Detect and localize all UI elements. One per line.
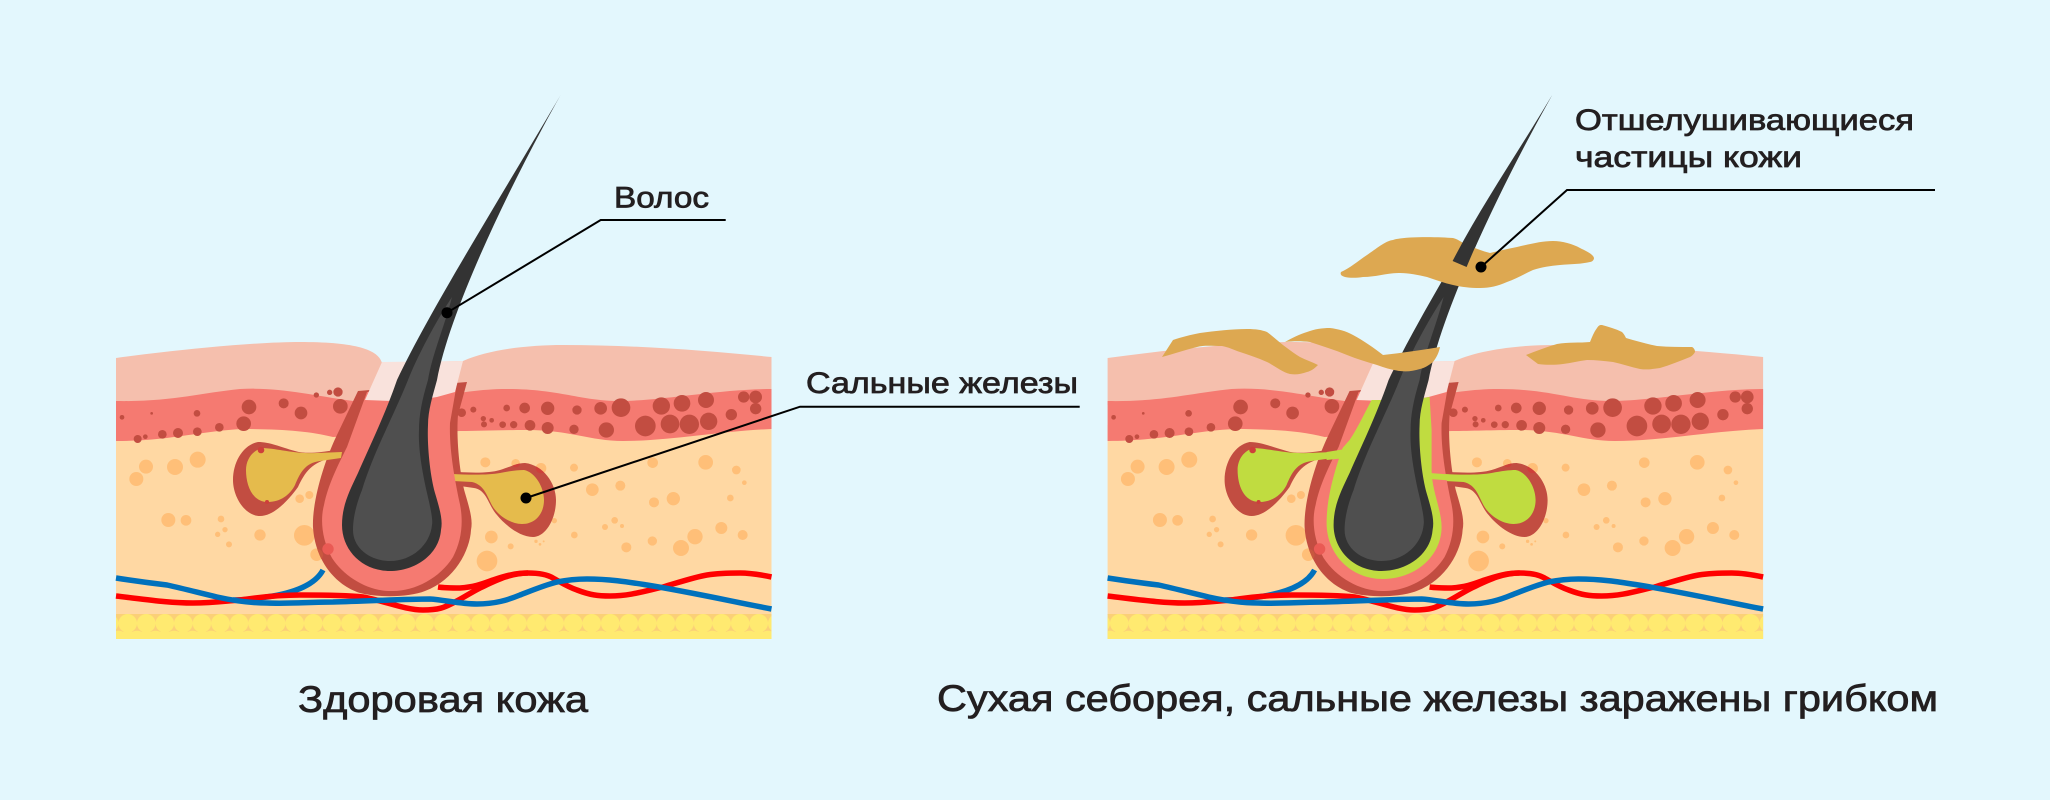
hair xyxy=(1334,95,1552,571)
skin layers with fat dots and blood vessels xyxy=(116,342,772,639)
icon: infected sebaceous glands xyxy=(1238,448,1536,524)
follicle wall and sebaceous gland walls xyxy=(233,382,556,596)
flaking skin particles xyxy=(1162,237,1695,374)
hair tip above flake xyxy=(1453,95,1552,267)
skin layers with fat dots and blood vessels xyxy=(1108,342,1763,639)
caption: dry seborrhea: Сухая себорея, сальные железы заражены грибком xyxy=(937,678,1938,719)
caption: healthy skin: Здоровая кожа xyxy=(298,679,588,720)
follicle interior xyxy=(322,361,463,591)
callout dot xyxy=(1476,262,1486,272)
panel: healthy skin diagram xyxy=(116,95,772,639)
dermal dots xyxy=(120,387,762,561)
follicle interior xyxy=(1314,361,1455,591)
label line 2: частицы кожи xyxy=(1575,141,1802,174)
icon: healthy sebaceous glands xyxy=(246,448,544,524)
callout: flaking skin particles xyxy=(1476,104,1935,272)
follicle wall and sebaceous gland walls xyxy=(1225,382,1548,596)
fungal sheath around hair xyxy=(1327,397,1457,579)
callout line xyxy=(526,407,1080,498)
callout: sebaceous glands xyxy=(520,367,1080,504)
panel: dry seborrhea skin diagram xyxy=(1108,95,1763,639)
callout line xyxy=(447,220,726,313)
label: hair: Волос xyxy=(614,182,709,214)
dermal dots xyxy=(1111,387,1754,561)
label: sebaceous glands: Сальные железы xyxy=(806,367,1078,400)
callout dot xyxy=(442,307,452,318)
callout line xyxy=(1481,190,1935,267)
infographic canvas xyxy=(116,96,1936,720)
callout: hair xyxy=(442,182,726,318)
label line 1: Отшелушивающиеся xyxy=(1575,104,1914,137)
callout dot xyxy=(520,492,532,504)
hair xyxy=(342,95,561,571)
